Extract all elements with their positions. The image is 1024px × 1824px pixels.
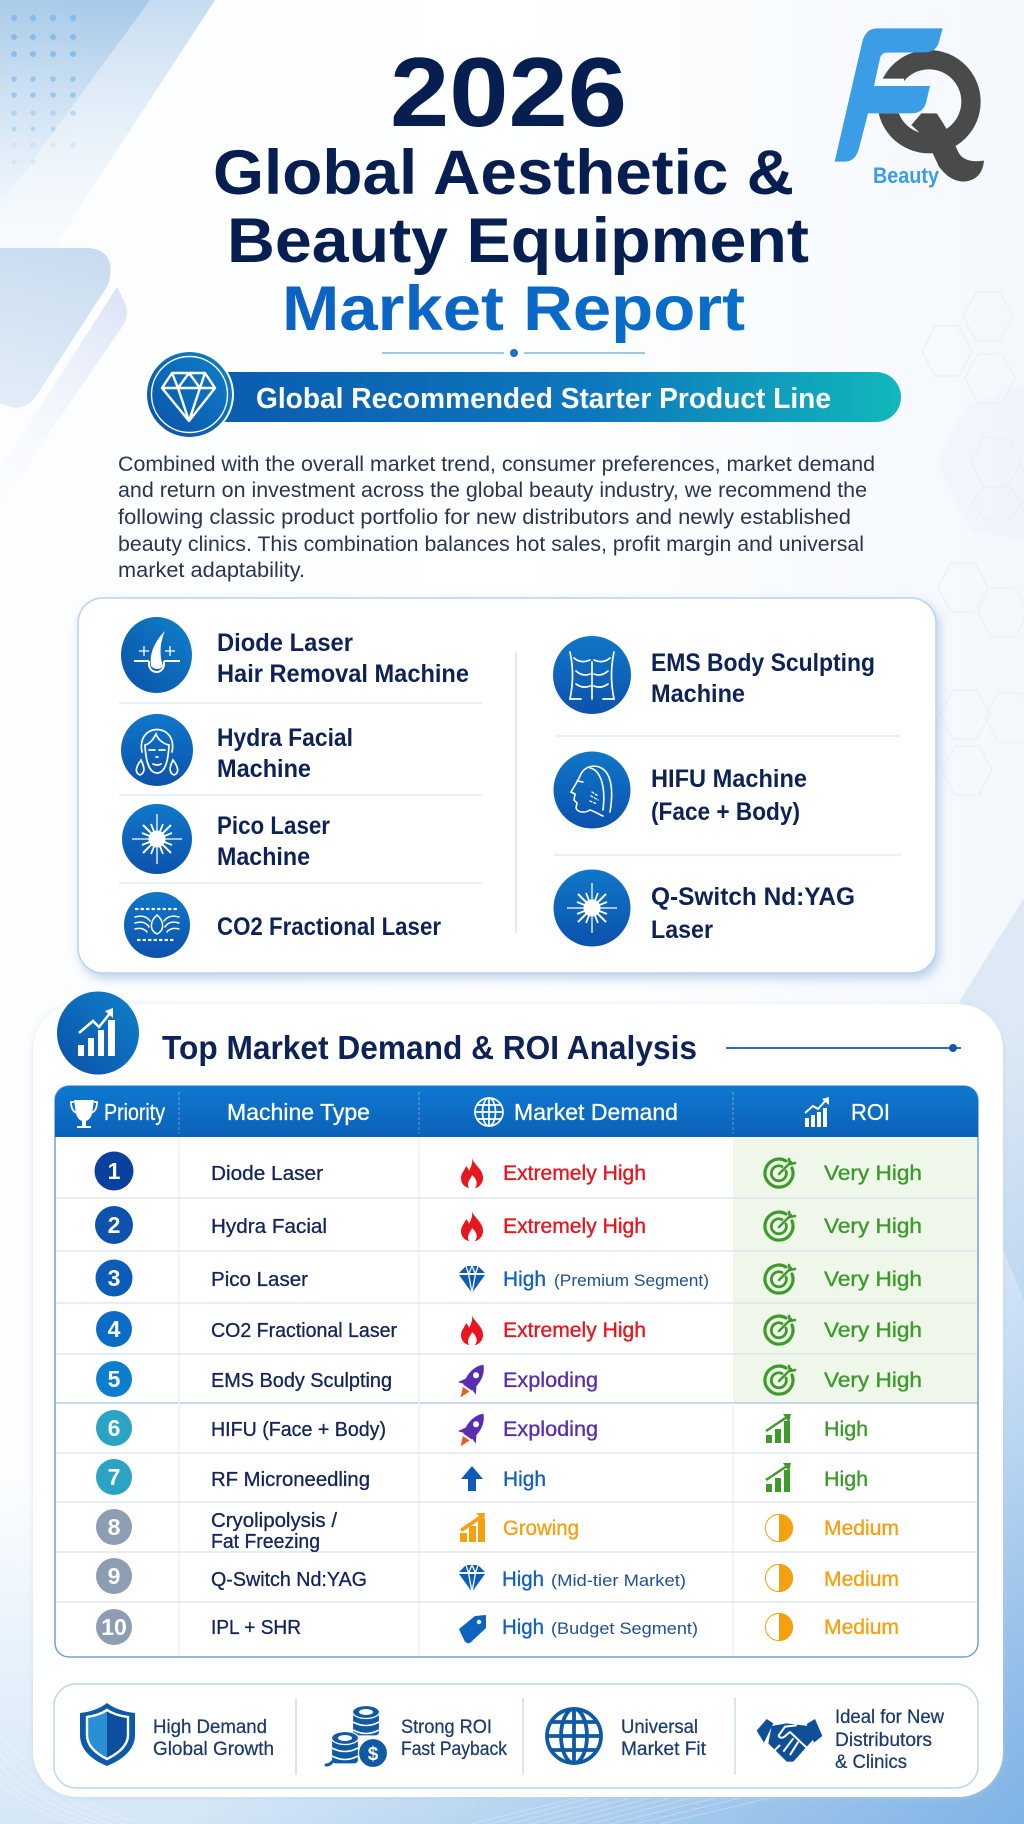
row 5: 5 xyxy=(108,1366,121,1392)
row 8 xyxy=(96,1509,899,1553)
row 2: Hydra Facial xyxy=(211,1216,327,1238)
row 1: Very High xyxy=(824,1162,922,1185)
row 7: RF Microneedling xyxy=(211,1469,370,1491)
row 4: 4 xyxy=(108,1316,121,1342)
logo: FQ Beauty xyxy=(835,28,984,188)
panel: market demand and ROI xyxy=(33,992,1003,1797)
benefit: strong ROI xyxy=(326,1706,507,1768)
heading: Top Market Demand & ROI Analysis xyxy=(162,1029,697,1066)
benefit: ideal for new distributors: Distributors xyxy=(835,1730,932,1751)
item: Diode Laser: Diode Laser xyxy=(217,629,353,657)
item: Diode Laser: Hair Removal Machine xyxy=(217,660,469,688)
row 6: High xyxy=(824,1418,868,1441)
icon: globe xyxy=(475,1098,503,1126)
intro paragraph: market adaptability. xyxy=(118,559,305,582)
item: HIFU Machine xyxy=(554,752,807,828)
item: EMS Body Sculpting: Machine xyxy=(651,680,745,708)
row 9: 9 xyxy=(108,1563,120,1589)
benefits strip xyxy=(54,1684,978,1788)
item: EMS Body Sculpting xyxy=(553,636,875,714)
intro paragraph: beauty clinics. This combination balances hot sales, profit margin and universal xyxy=(118,533,864,556)
item: EMS Body Sculpting: EMS Body Sculpting xyxy=(651,649,875,677)
row 8: Cryolipolysis / xyxy=(211,1510,337,1532)
item: Q-Switch Nd:YAG: Q-Switch Nd:YAG xyxy=(651,883,855,911)
row 5 xyxy=(96,1358,922,1404)
row 10: IPL + SHR xyxy=(211,1617,301,1639)
item: Q-Switch Nd:YAG xyxy=(554,870,855,946)
row 4: CO2 Fractional Laser xyxy=(211,1320,397,1342)
row 2: Extremely High xyxy=(503,1215,646,1238)
item: Hydra Facial: Machine xyxy=(217,755,311,783)
row 9: Medium xyxy=(824,1568,899,1591)
table xyxy=(55,1086,978,1657)
benefit: universal market fit: Market Fit xyxy=(621,1739,707,1760)
section banner: Global Recommended Starter Product Line xyxy=(256,383,831,415)
icon: rising chart badge xyxy=(57,992,139,1074)
row 10 xyxy=(96,1609,899,1645)
logo: FQ Beauty: Beauty xyxy=(873,163,939,188)
row 1 xyxy=(94,1152,922,1190)
row 4: Extremely High xyxy=(503,1319,646,1342)
item: Pico Laser: Pico Laser xyxy=(217,812,330,840)
item: Hydra Facial: Hydra Facial xyxy=(217,724,353,752)
item: HIFU Machine: HIFU Machine xyxy=(651,765,807,793)
row 6: Exploding xyxy=(503,1418,598,1441)
item: Q-Switch Nd:YAG: Laser xyxy=(651,916,713,944)
item: HIFU Machine: (Face + Body) xyxy=(651,798,800,826)
row 3: (Premium Segment) xyxy=(554,1272,709,1290)
row 3 xyxy=(96,1260,922,1296)
intro paragraph: and return on investment across the global beauty industry, we recommend the xyxy=(118,479,867,502)
benefit: high demand: Global Growth xyxy=(153,1739,274,1760)
row 10: 10 xyxy=(101,1614,127,1640)
row 10: High xyxy=(502,1616,544,1639)
row 7: High xyxy=(503,1468,546,1491)
item: Pico Laser xyxy=(122,804,330,874)
title: Market Report xyxy=(282,274,745,344)
row 5: Very High xyxy=(824,1369,922,1392)
row 7: High xyxy=(824,1468,868,1491)
benefit: high demand: High Demand xyxy=(153,1717,267,1738)
title: Beauty Equipment xyxy=(227,206,809,276)
row 9: Q-Switch Nd:YAG xyxy=(211,1569,367,1591)
row 10: Medium xyxy=(824,1616,899,1639)
title: 2026 xyxy=(390,37,627,147)
row 3: 3 xyxy=(108,1265,120,1291)
row 2: 2 xyxy=(108,1212,120,1238)
row 9 xyxy=(96,1558,899,1594)
benefit: ideal for new distributors: Ideal for New xyxy=(835,1707,944,1728)
title divider xyxy=(382,349,645,357)
benefit: ideal for new distributors xyxy=(757,1707,944,1773)
row 6 xyxy=(96,1407,868,1453)
table header xyxy=(55,1086,978,1137)
row 10: (Budget Segment) xyxy=(551,1620,698,1638)
benefit: universal market fit: Universal xyxy=(621,1717,698,1738)
benefit: strong ROI: Strong ROI xyxy=(401,1717,492,1738)
row 5: Exploding xyxy=(503,1369,598,1392)
section banner xyxy=(145,350,901,439)
row 1: Diode Laser xyxy=(211,1163,323,1185)
row 9: (Mid-tier Market) xyxy=(551,1572,686,1590)
title: Global Aesthetic & xyxy=(213,138,794,208)
row 8: Medium xyxy=(824,1517,899,1540)
item: Hydra Facial xyxy=(121,714,353,786)
row 8: 8 xyxy=(108,1514,121,1540)
item: CO2 Fractional Laser: CO2 Fractional Laser xyxy=(217,913,441,941)
table header: Market Demand xyxy=(514,1099,678,1125)
row 4 xyxy=(96,1311,922,1347)
row 3: Very High xyxy=(824,1268,922,1291)
intro paragraph xyxy=(118,453,875,582)
row 6: HIFU (Face + Body) xyxy=(211,1419,386,1441)
heading rule xyxy=(726,1044,961,1052)
hexagon pattern xyxy=(922,292,1024,795)
row 2 xyxy=(95,1206,922,1244)
item: Pico Laser: Machine xyxy=(217,843,310,871)
icon: up arrow xyxy=(461,1466,483,1491)
table header: ROI xyxy=(851,1099,890,1125)
row 8: Growing xyxy=(503,1517,579,1540)
benefit: universal market fit xyxy=(547,1709,707,1763)
row 5: EMS Body Sculpting xyxy=(211,1370,392,1392)
icon: price tag xyxy=(459,1615,486,1643)
row 1: 1 xyxy=(108,1158,121,1184)
item: CO2 Fractional Laser xyxy=(124,892,441,958)
intro paragraph: Combined with the overall market trend, consumer preferences, market demand xyxy=(118,453,875,476)
benefit: ideal for new distributors: & Clinics xyxy=(835,1752,907,1773)
item: Diode Laser xyxy=(121,617,469,693)
icon: diamond badge xyxy=(145,350,234,439)
icon: trophy xyxy=(71,1100,97,1128)
row 7: 7 xyxy=(108,1464,120,1490)
row 9: High xyxy=(502,1568,544,1591)
row 4: Very High xyxy=(824,1319,922,1342)
icon: ROI chart xyxy=(805,1097,829,1127)
title xyxy=(213,37,809,344)
row 1: Extremely High xyxy=(503,1162,646,1185)
row 3: High xyxy=(503,1268,546,1291)
row 8: Fat Freezing xyxy=(211,1531,320,1553)
row 2: Very High xyxy=(824,1215,922,1238)
row 6: 6 xyxy=(108,1415,120,1441)
intro paragraph: following classic product portfolio for new distributors and newly established xyxy=(118,506,851,529)
benefit: high demand xyxy=(80,1703,274,1766)
row 7 xyxy=(96,1459,868,1495)
table header: Machine Type xyxy=(227,1099,370,1125)
benefit: strong ROI: $ xyxy=(368,1744,379,1765)
table header: Priority xyxy=(104,1099,165,1125)
panel: starter product line xyxy=(78,598,936,973)
benefit: strong ROI: Fast Payback xyxy=(401,1739,507,1760)
row 3: Pico Laser xyxy=(211,1269,308,1291)
